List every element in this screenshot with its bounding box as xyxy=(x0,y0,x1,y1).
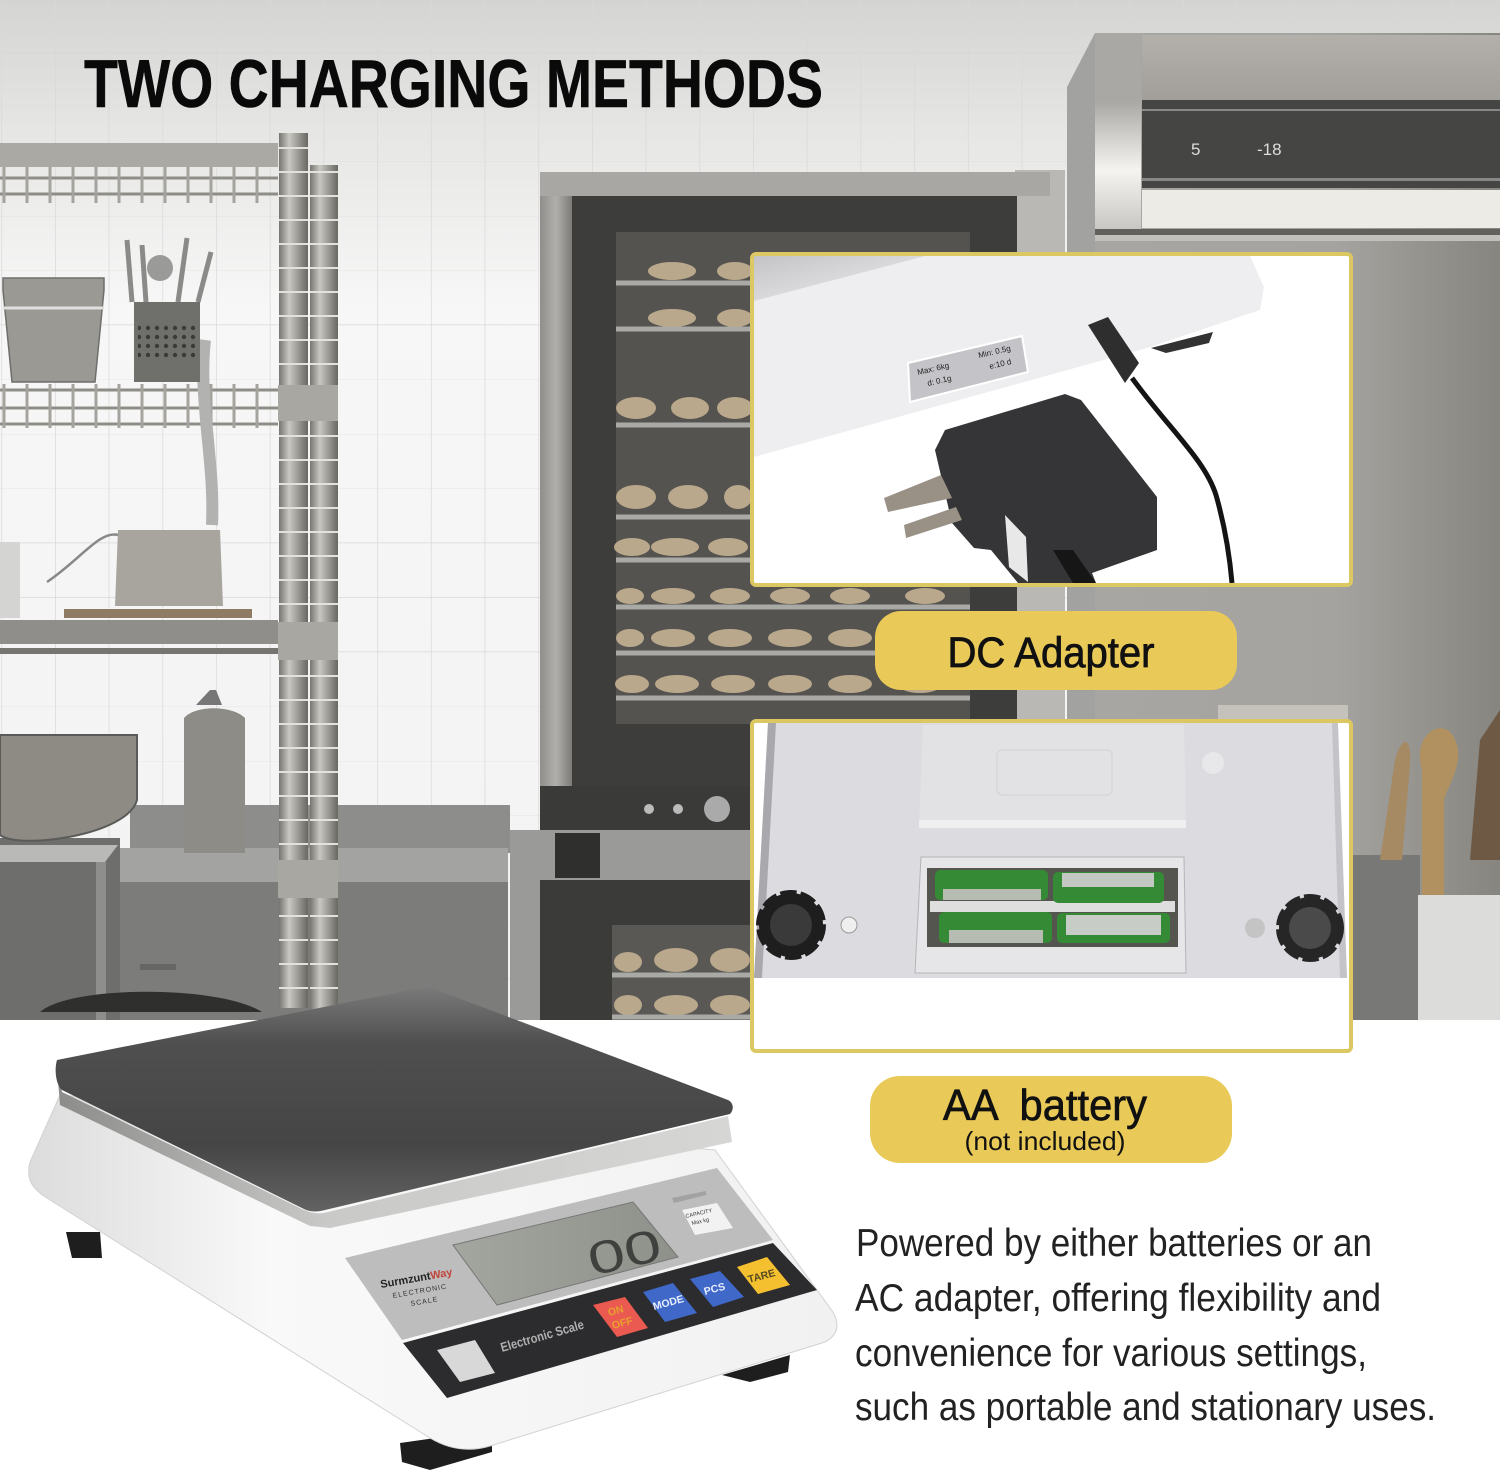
spec label: e:10 d xyxy=(988,357,1012,371)
keypad xyxy=(593,1257,790,1337)
LCD display xyxy=(453,1202,678,1305)
screw hole xyxy=(841,917,857,933)
spec label: d: 0.1g xyxy=(926,374,952,388)
spec label xyxy=(908,336,1028,402)
kitchenware on shelves xyxy=(0,238,252,853)
product: electronic scale xyxy=(29,987,837,1470)
panel border xyxy=(752,254,1351,585)
label: DC Adapter: DC Adapter xyxy=(948,629,1154,677)
fridge xyxy=(1067,33,1500,1020)
fridge: -18 xyxy=(1257,140,1282,159)
capacity label: CAPACITY xyxy=(685,1208,713,1220)
battery compartment xyxy=(915,857,1186,973)
brand xyxy=(379,1266,454,1308)
label: AA battery: (not included) xyxy=(964,1126,1126,1156)
description text: such as portable and stationary uses. xyxy=(855,1386,1436,1429)
QC sticker xyxy=(1202,752,1224,774)
keypad: PCS xyxy=(703,1281,727,1298)
weighing plate lip xyxy=(57,1068,732,1228)
lower oven compartment xyxy=(510,830,770,1020)
capacity label xyxy=(672,1191,733,1235)
feet xyxy=(66,1232,790,1470)
brand: ELECTRONIC xyxy=(392,1284,448,1300)
keypad: ON xyxy=(607,1303,625,1319)
grey front fascia xyxy=(345,1168,773,1340)
label: DC Adapter xyxy=(875,611,1237,690)
spec label: Max: 6kg xyxy=(916,361,950,377)
wooden utensils xyxy=(1218,705,1500,1020)
panel: AA battery photo xyxy=(752,721,1351,1051)
description text: convenience for various settings, xyxy=(855,1332,1367,1375)
label: AA battery: AA battery xyxy=(943,1081,1147,1130)
panel border xyxy=(752,721,1351,1051)
spec label: Min: 0.5g xyxy=(977,344,1012,360)
black control strip xyxy=(403,1243,817,1398)
LCD display: 00 xyxy=(583,1218,666,1286)
power plug and cable xyxy=(1088,317,1232,583)
fridge: 5 xyxy=(1191,140,1200,159)
brand: SCALE xyxy=(410,1296,439,1308)
scale body xyxy=(29,1095,837,1449)
power switch xyxy=(437,1340,495,1382)
label: AA battery xyxy=(870,1076,1232,1163)
model text: Electronic Scale xyxy=(499,1317,585,1355)
description text: Powered by either batteries or an xyxy=(856,1222,1372,1265)
round sticker xyxy=(1245,918,1265,938)
scale underside xyxy=(754,256,1264,457)
keypad: MODE xyxy=(652,1293,685,1313)
counter and cupboard xyxy=(0,805,510,1020)
weighing plate xyxy=(56,987,733,1212)
rubber foot xyxy=(1151,332,1213,353)
panel: DC adapter photo xyxy=(752,254,1351,585)
description text xyxy=(855,1222,1436,1429)
keypad: OFF xyxy=(611,1315,635,1332)
wire shelving xyxy=(0,133,338,1010)
oven with bread trays xyxy=(540,170,1065,833)
battery door xyxy=(919,725,1186,828)
rubber feet xyxy=(759,893,1341,959)
title: TWO CHARGING METHODS xyxy=(84,46,823,122)
adapter xyxy=(884,394,1157,583)
capacity label: Max kg xyxy=(691,1217,710,1227)
keypad: TARE xyxy=(747,1267,777,1286)
background: kitchen photo xyxy=(0,0,1500,1020)
description text: AC adapter, offering flexibility and xyxy=(855,1277,1381,1320)
brand: SurmzuntWay xyxy=(379,1266,454,1291)
